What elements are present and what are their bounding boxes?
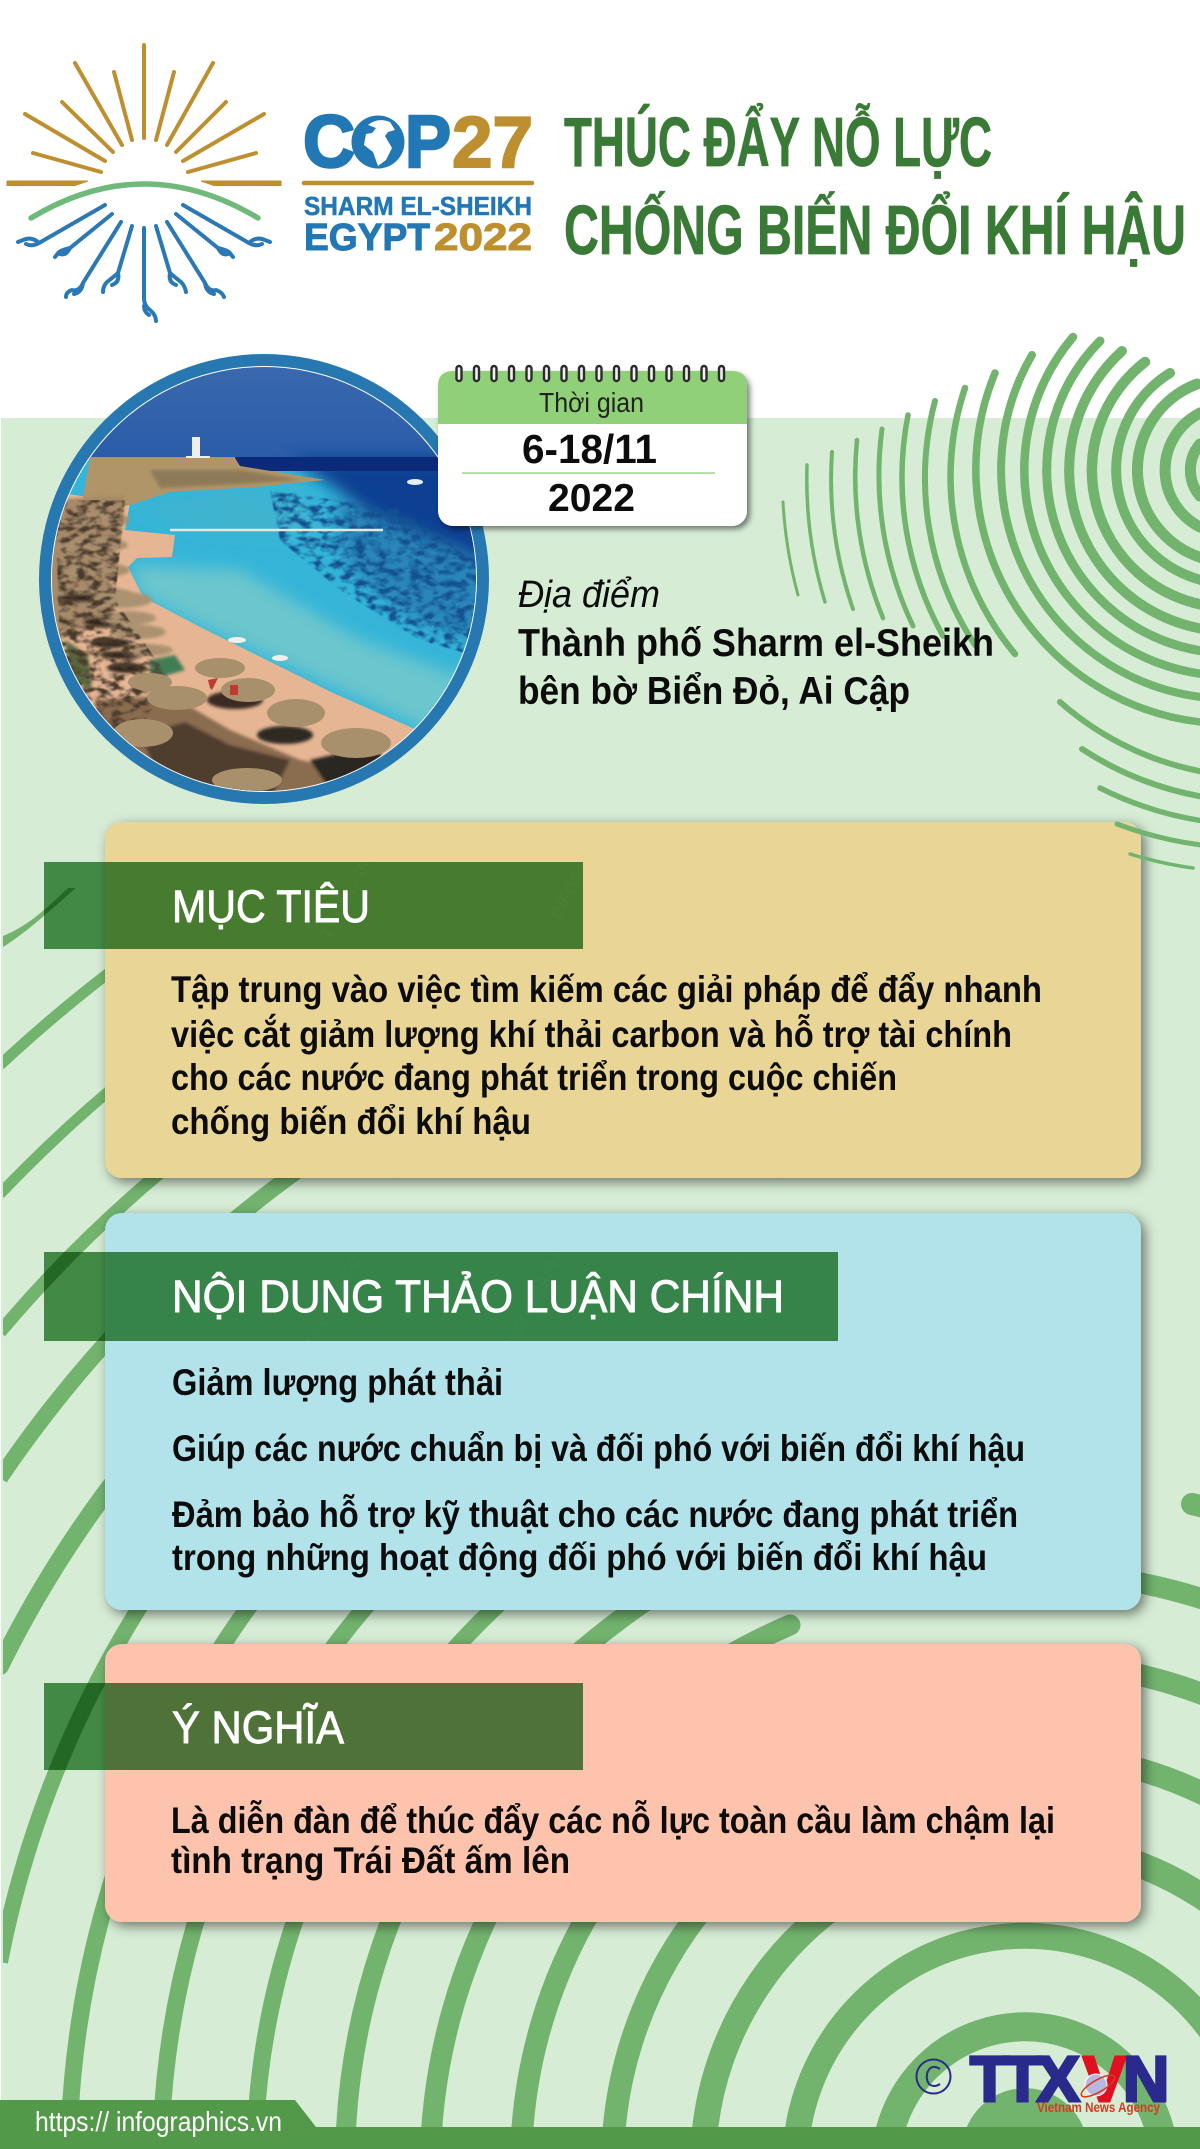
header: COP27 wordmark — [303, 100, 533, 259]
heading bar: Ý nghĩa — [44, 1683, 583, 1770]
calendar: Thời gian: 2022 — [548, 477, 635, 520]
location text: bên bờ Biển Đỏ, Ai Cập — [518, 670, 910, 713]
calendar: Thời gian — [438, 366, 747, 526]
header: COP27 wordmark: P — [405, 100, 451, 183]
card: Mục tiêu — [105, 822, 1141, 1178]
body text: Mục tiêu: Tập trung vào việc tìm kiếm các giải pháp để đẩy nhanh — [171, 969, 1042, 1010]
header: COP27 wordmark: C — [303, 100, 355, 183]
body text: Mục tiêu — [171, 969, 1042, 1142]
faint diagonal watermarks — [297, 755, 903, 1394]
header: COP27 sun emblem — [7, 45, 281, 321]
heading bar: Nội dung thảo luận chính — [44, 1252, 838, 1341]
faint diagonal watermarks: TTXVN - INFOGRAPHICS — [297, 1173, 408, 1360]
logo: TTXVN Vietnam News Agency: Vietnam News Agency — [1037, 2099, 1160, 2115]
calendar: Thời gian: 6-18/11 — [522, 426, 657, 472]
faint diagonal watermarks: INFOGRAPHICS — [825, 1270, 903, 1394]
calendar: Thời gian: Thời gian — [539, 387, 644, 418]
body text: Nội dung — [172, 1362, 1025, 1578]
location text: Thành phố Sharm el-Sheikh — [518, 622, 994, 665]
faint diagonal watermarks: TTXVN - INFOGRAPHICS — [699, 1140, 810, 1327]
header: COP27 wordmark: 27 — [452, 103, 533, 183]
body text: Mục tiêu: việc cắt giảm lượng khí thải carbon và hỗ trợ tài chính — [171, 1013, 1012, 1055]
footer bar with url: https:// infographics.vn — [35, 2106, 282, 2137]
title — [564, 102, 1186, 269]
body text: Nội dung: Giúp các nước chuẩn bị và đối phó với biến đổi khí hậu — [172, 1428, 1025, 1469]
location text: Địa điểm — [518, 574, 660, 616]
fingerprint rings, top right — [783, 337, 1200, 868]
card: Nội dung thảo luận chính — [105, 1213, 1141, 1610]
body text: Nội dung: Giảm lượng phát thải — [172, 1362, 503, 1403]
faint diagonal watermarks: INFOGRAPHICS — [502, 1226, 580, 1350]
header: COP27 wordmark: SHARM EL-SHEIKH — [304, 191, 532, 221]
header: COP27 wordmark: 2022 — [434, 217, 532, 259]
faint diagonal watermarks: TTXVN - INFOGRAPHICS — [317, 755, 428, 942]
background concentric rings — [0, 888, 1200, 2140]
body text: Mục tiêu: cho các nước đang phát triển trong cuộc chiến — [171, 1057, 897, 1098]
body text: Ý nghĩa: Là diễn đàn để thúc đẩy các nỗ lực toàn cầu làm chậm lại — [171, 1800, 1055, 1841]
calendar binder rings — [456, 366, 724, 381]
heading bar: Ý nghĩa: Ý NGHĨA — [172, 1702, 344, 1753]
location text — [518, 574, 994, 713]
heading bar: Mục tiêu: MỤC TIÊU — [172, 881, 370, 932]
faint diagonal watermarks: INFOGRAPHICS — [547, 798, 625, 922]
card: Ý nghĩa — [105, 1644, 1141, 1922]
body text: Ý nghĩa — [171, 1800, 1055, 1881]
header: COP27 wordmark: EGYPT — [304, 217, 430, 259]
heading bar: Mục tiêu — [44, 862, 583, 949]
body text: Nội dung: Đảm bảo hỗ trợ kỹ thuật cho các nước đang phát triển — [172, 1494, 1018, 1535]
body text: Ý nghĩa: tình trạng Trái Đất ấm lên — [171, 1840, 570, 1881]
heading bar: Nội dung thảo luận chính: NỘI DUNG THẢO LUẬN CHÍNH — [172, 1271, 784, 1322]
body text: Nội dung: trong những hoạt động đối phó với biến đổi khí hậu — [172, 1537, 987, 1578]
footer bar with url — [0, 2100, 1200, 2149]
body text: Mục tiêu: chống biến đổi khí hậu — [171, 1101, 531, 1142]
logo: TTXVN Vietnam News Agency: TTXVN — [970, 2043, 1169, 2115]
photo: Sharm el-Sheikh beach in a blue ring — [39, 354, 490, 850]
